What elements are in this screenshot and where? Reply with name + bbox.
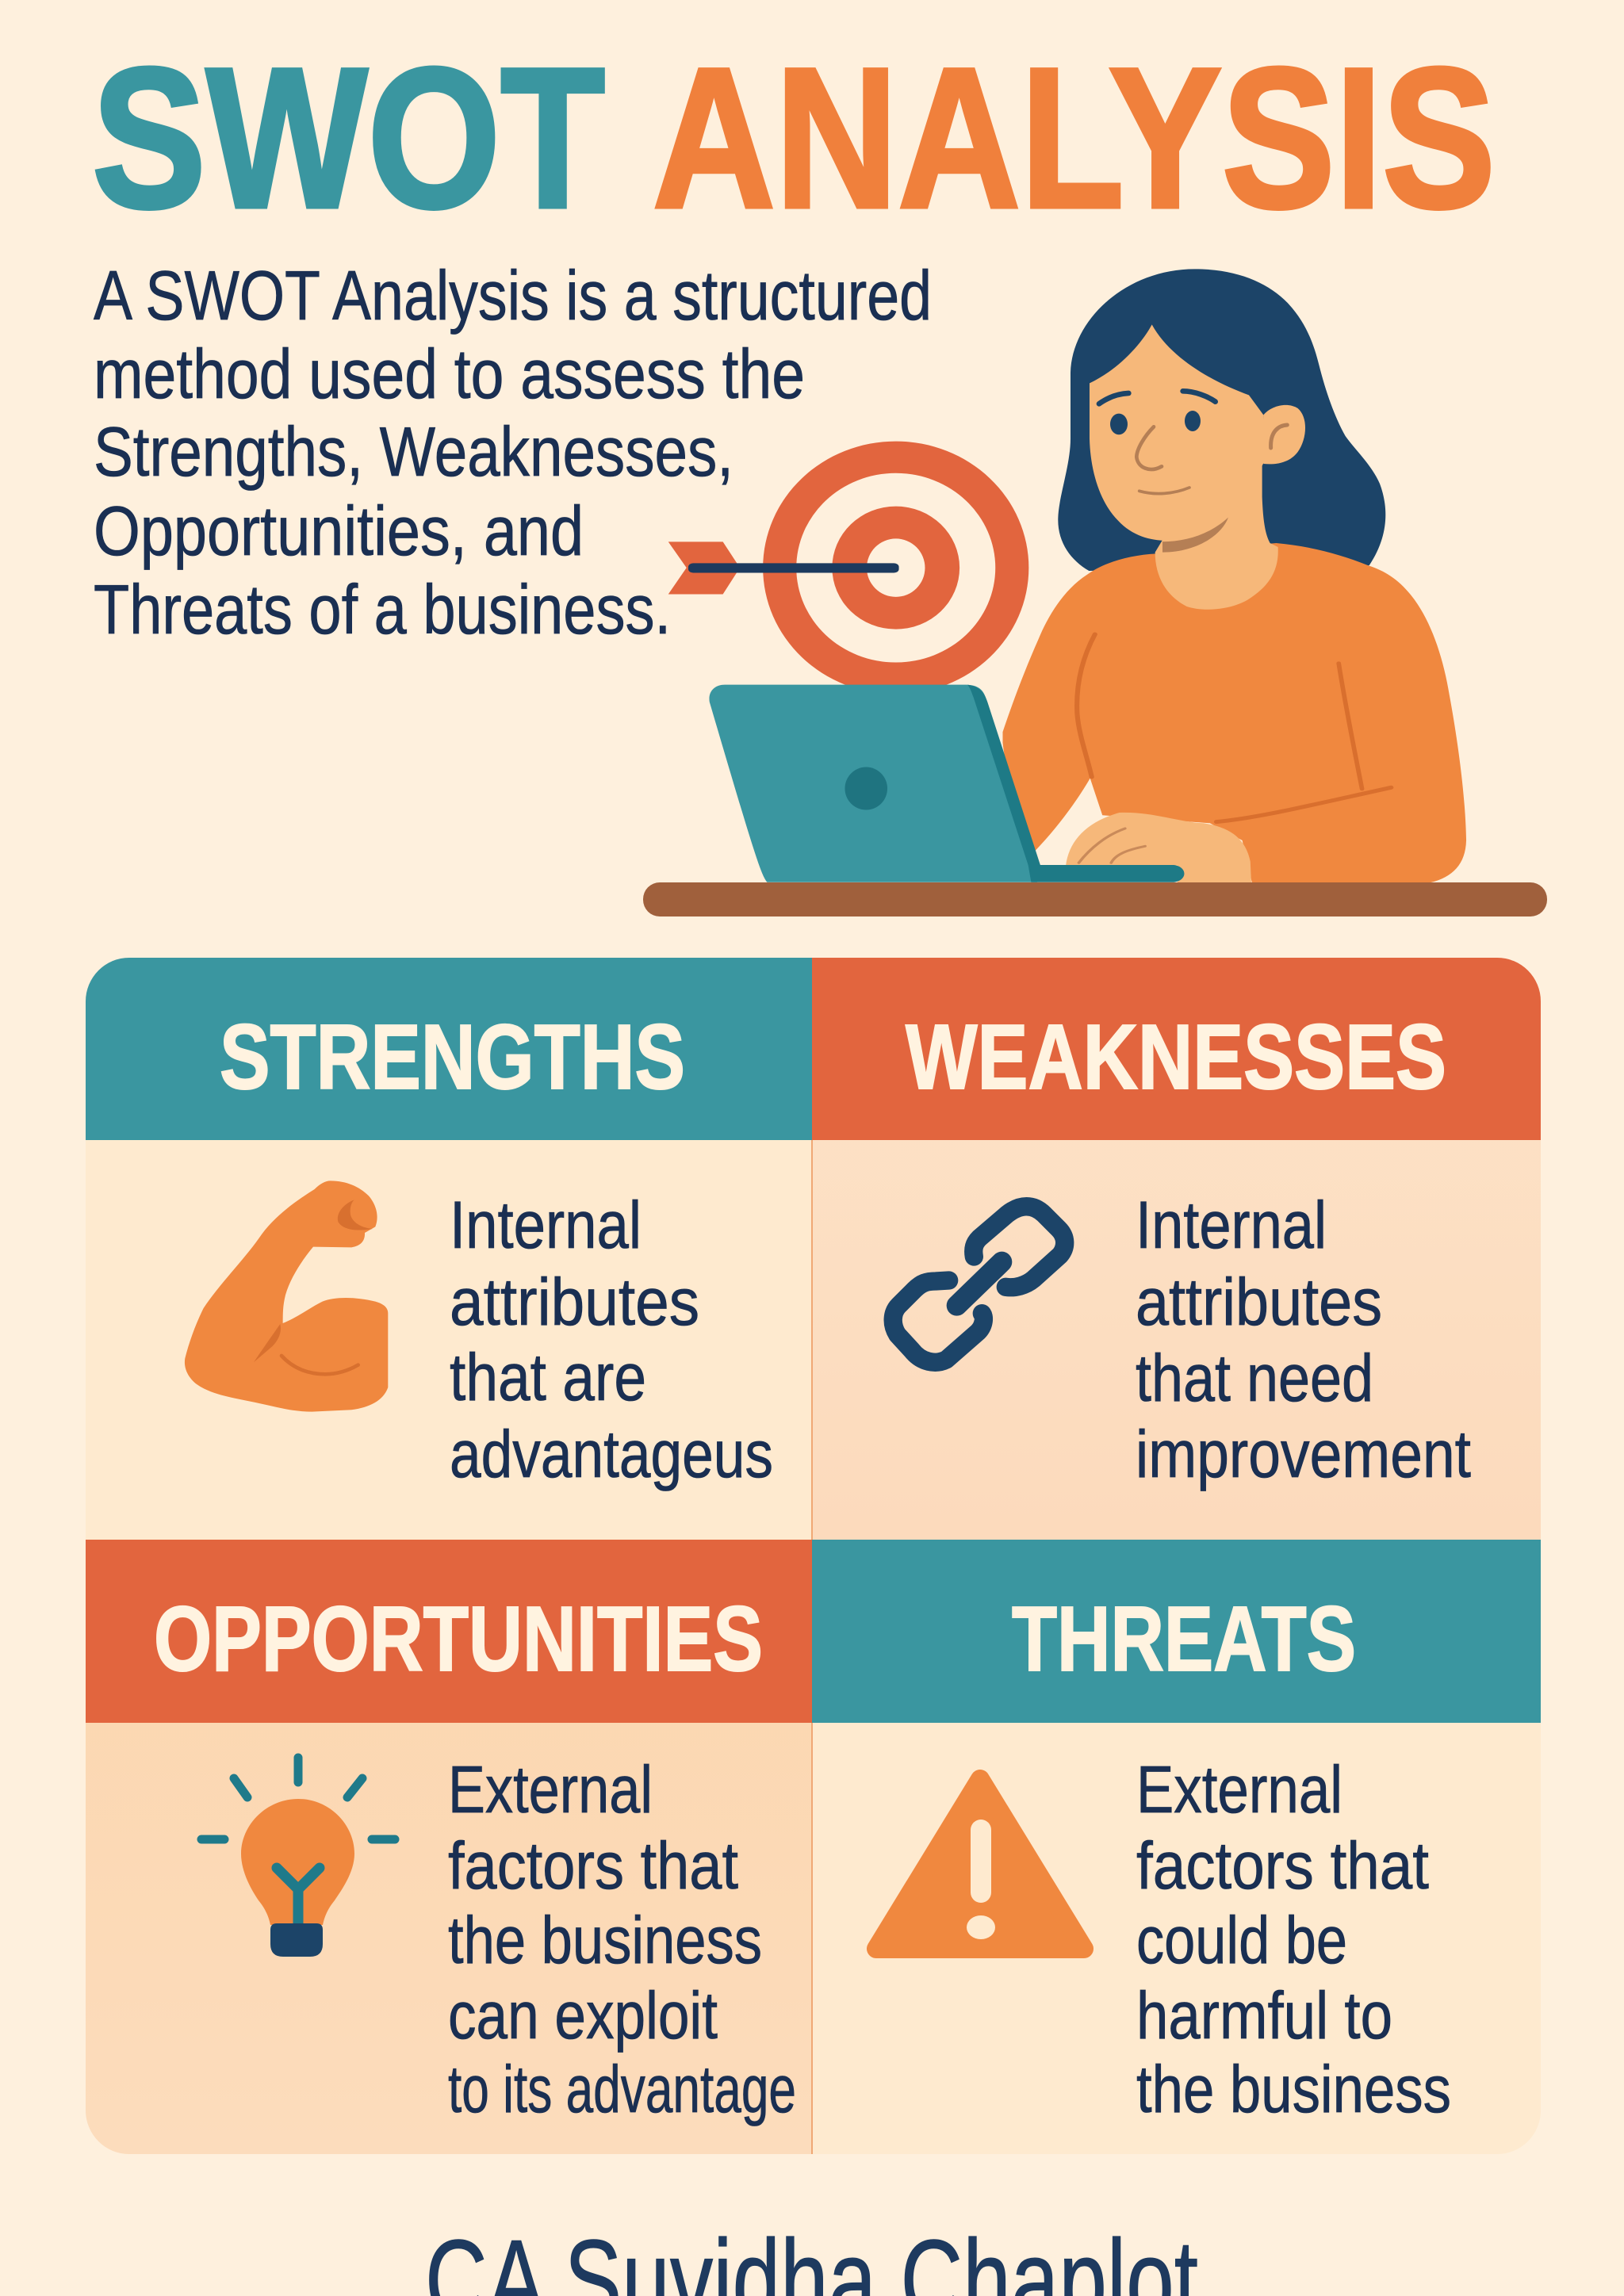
quadrant: opportunities (86, 1540, 812, 2154)
quadrant: threats: THREATS (1012, 1587, 1356, 1690)
quadrant: weaknesses: WEAKNESSES (906, 1005, 1446, 1108)
quadrant: weaknesses (812, 958, 1541, 1540)
weaknesses text: that need (1136, 1341, 1373, 1415)
hand (1066, 813, 1251, 882)
icon: light bulb (201, 1758, 395, 1957)
quadrant: threats (812, 1540, 1541, 2154)
title: ANALYSIS (653, 27, 1496, 250)
opportunities text (448, 1752, 796, 2126)
strengths text (450, 1188, 773, 1491)
quadrant: strengths: STRENGTHS (220, 1005, 685, 1108)
person head (1090, 324, 1305, 610)
laptop (709, 685, 1184, 882)
threats text: harmful to (1136, 1978, 1392, 2053)
threats text: factors that (1136, 1828, 1429, 1903)
threats text (1136, 1752, 1451, 2126)
threats text: the business (1136, 2052, 1451, 2126)
threats text: External (1136, 1752, 1342, 1827)
quadrant: opportunities: OPPORTUNITIES (154, 1587, 763, 1690)
person sweater (1002, 543, 1466, 882)
title (92, 27, 1496, 250)
desk (643, 882, 1547, 916)
quadrant: strengths (86, 958, 812, 1540)
intro text: Opportunities, and (94, 492, 584, 570)
intro text: Strengths, Weaknesses, (94, 412, 733, 491)
opportunities text: External (448, 1752, 653, 1827)
icon: chain (893, 1207, 1065, 1362)
weaknesses text: improvement (1136, 1417, 1471, 1491)
icon: warning triangle (876, 1779, 1084, 1949)
illustration: person at laptop with target (643, 269, 1547, 916)
person hair (1058, 269, 1385, 571)
icon: flexed arm (185, 1181, 388, 1412)
title: SWOT (92, 27, 605, 250)
strengths text: that are (450, 1340, 646, 1414)
opportunities text: can exploit (448, 1978, 718, 2053)
intro text (94, 256, 932, 649)
weaknesses text: Internal (1136, 1188, 1327, 1262)
threats text: could be (1136, 1903, 1347, 1977)
strengths text: attributes (450, 1265, 699, 1339)
intro text: A SWOT Analysis is a structured (94, 256, 932, 335)
opportunities text: the business (448, 1903, 762, 1977)
intro text: Threats of a business. (94, 570, 671, 649)
opportunities text: to its advantage (448, 2052, 796, 2126)
icon: arrow (668, 541, 899, 594)
icon: target (763, 442, 1028, 695)
strengths text: Internal (450, 1188, 642, 1262)
weaknesses text: attributes (1136, 1265, 1382, 1339)
weaknesses text (1136, 1188, 1471, 1491)
strengths text: advantageus (450, 1417, 773, 1491)
SWOT panel (86, 958, 1541, 2154)
intro text: method used to assess the (94, 335, 805, 413)
opportunities text: factors that (448, 1828, 738, 1903)
